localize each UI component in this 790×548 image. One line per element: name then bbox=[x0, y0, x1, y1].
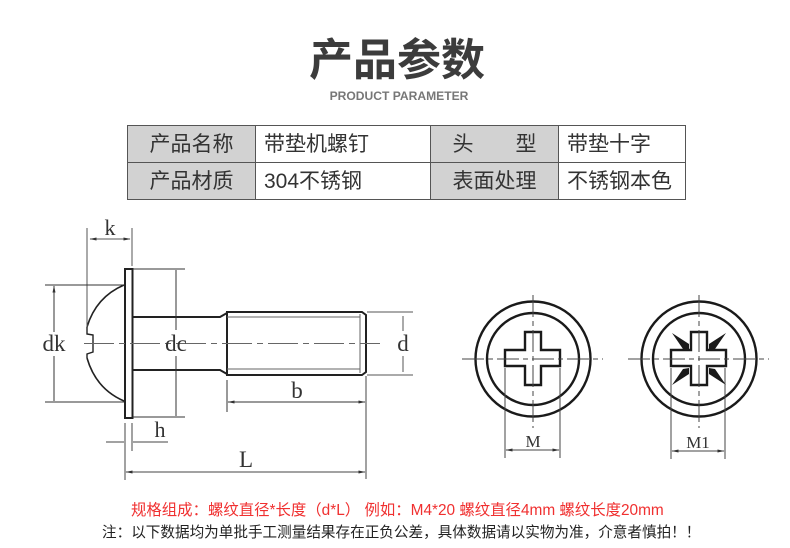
cell: product name label: 产品名称 bbox=[150, 133, 234, 156]
dimension d: d bbox=[397, 331, 409, 356]
dimension k bbox=[87, 215, 132, 327]
cell: product name value: 带垫机螺钉 bbox=[264, 133, 369, 156]
dimension k: k bbox=[104, 215, 116, 240]
dimension M1 bbox=[671, 368, 725, 459]
cell: head type label: 头 型 bbox=[452, 133, 536, 156]
cell: surface treatment value: 不锈钢本色 bbox=[567, 170, 672, 193]
title: 产品参数 bbox=[309, 36, 485, 85]
dimension dk bbox=[42, 285, 124, 402]
cell: surface treatment label bbox=[430, 162, 559, 200]
dimension M: M bbox=[525, 432, 541, 451]
cell: material value bbox=[255, 162, 431, 200]
washer head bbox=[87, 269, 132, 418]
red specification note: 规格组成：螺纹直径*长度（d*L） 例如：M4*20 螺纹直径4mm 螺纹长度20mm bbox=[131, 502, 664, 519]
shank bbox=[132, 313, 227, 374]
cross recess bbox=[671, 332, 726, 385]
cell: material label: 产品材质 bbox=[150, 170, 234, 193]
dimension L: L bbox=[239, 447, 253, 472]
dimension b: b bbox=[291, 378, 303, 403]
dimension M1: M1 bbox=[686, 433, 710, 452]
cell: product name value bbox=[255, 125, 431, 163]
washer and head circles bbox=[642, 302, 756, 416]
cell: head type value: 带垫十字 bbox=[567, 133, 651, 156]
cross recess head view M bbox=[462, 295, 603, 458]
cell: product name label bbox=[127, 125, 256, 163]
cell: material value: 304不锈钢 bbox=[264, 170, 362, 193]
washer and head circles bbox=[476, 302, 590, 416]
threaded section bbox=[227, 312, 366, 375]
cell: head type value bbox=[558, 125, 686, 163]
dimension h bbox=[106, 417, 168, 480]
dimension d bbox=[367, 312, 413, 375]
cross recess bbox=[505, 332, 560, 385]
dimension dc bbox=[133, 269, 187, 417]
cell: surface treatment value bbox=[558, 162, 686, 200]
screw side view diagram bbox=[42, 215, 413, 480]
subtitle: PRODUCT PARAMETER bbox=[330, 89, 468, 103]
dimension M bbox=[505, 368, 560, 458]
dimension dk: dk bbox=[42, 331, 66, 356]
centre lines bbox=[462, 295, 603, 428]
parameter table bbox=[127, 125, 686, 200]
centre lines bbox=[628, 295, 769, 428]
cell: head type label bbox=[430, 125, 559, 163]
dimension h: h bbox=[154, 417, 166, 442]
diagonal pozi marks bbox=[672, 333, 726, 385]
dimension b bbox=[227, 378, 365, 412]
cell: surface treatment label: 表面处理 bbox=[452, 170, 536, 193]
pozi recess head view M1 bbox=[628, 295, 769, 459]
black disclaimer note: 注：以下数据均为单批手工测量结果存在正负公差，具体数据请以实物为准，介意者慎拍！！ bbox=[102, 525, 700, 541]
cell: material label bbox=[127, 162, 256, 200]
centre line bbox=[84, 342, 380, 344]
dimension dc: dc bbox=[165, 331, 187, 356]
